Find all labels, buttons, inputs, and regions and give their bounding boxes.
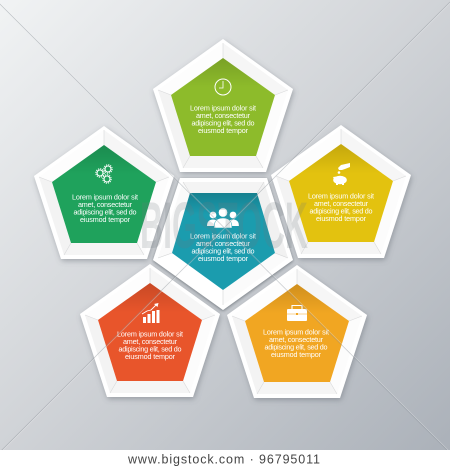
text: orange: Lorem ipsum dolor sit (263, 328, 329, 336)
pentagon: red lower left (80, 264, 220, 397)
text: emerald: adipiscing elit, sed do (74, 208, 136, 216)
text: yellow (308, 192, 374, 223)
pentagon: green top (153, 39, 293, 172)
text: orange (263, 328, 329, 359)
text: emerald: eiusmod tempor (80, 215, 131, 224)
text: emerald: amet, consectetur (78, 200, 133, 209)
text: teal: eiusmod tempor (198, 254, 249, 263)
text: yellow: amet, consectetur (314, 199, 369, 208)
text: teal: adipiscing elit, sed do (192, 246, 254, 256)
text: www.bigstock.com · 96795011 (127, 452, 320, 466)
text: yellow: eiusmod tempor (316, 214, 367, 223)
text: green: adipiscing elit, sed do (192, 118, 254, 128)
icon: hand and piggy bank (333, 163, 350, 185)
text: green (190, 104, 256, 135)
text: red: eiusmod tempor (125, 352, 176, 361)
text: teal: Lorem ipsum dolor sit (190, 232, 256, 240)
icon: rising bar chart (142, 303, 160, 323)
text: teal: amet, consectetur (196, 239, 251, 248)
text: yellow: adipiscing elit, sed do (310, 206, 372, 216)
text: green: Lorem ipsum dolor sit (190, 104, 256, 112)
footer (0, 450, 450, 470)
text: red (117, 330, 183, 361)
text: teal (190, 232, 256, 263)
pentagon: teal centre (153, 178, 293, 310)
pentagon: yellow right (271, 125, 411, 258)
text: yellow: Lorem ipsum dolor sit (308, 192, 374, 200)
pentagon: emerald left (34, 126, 174, 259)
text: green: amet, consectetur (196, 111, 251, 120)
text: green: eiusmod tempor (198, 126, 249, 135)
icon: team of people (207, 208, 239, 228)
icon: clock (215, 79, 231, 95)
text: red: Lorem ipsum dolor sit (117, 330, 183, 338)
text: red: adipiscing elit, sed do (118, 344, 182, 354)
text: orange: amet, consectetur (269, 335, 324, 344)
text: orange: eiusmod tempor (271, 350, 322, 359)
text: emerald (72, 192, 138, 224)
pentagon: orange lower right (227, 265, 367, 398)
icon: briefcase (287, 306, 307, 321)
text: red: amet, consectetur (123, 337, 178, 346)
text: orange: adipiscing elit, sed do (264, 342, 328, 352)
icon: gears (96, 165, 112, 183)
text: emerald: Lorem ipsum dolor sit (72, 192, 138, 202)
